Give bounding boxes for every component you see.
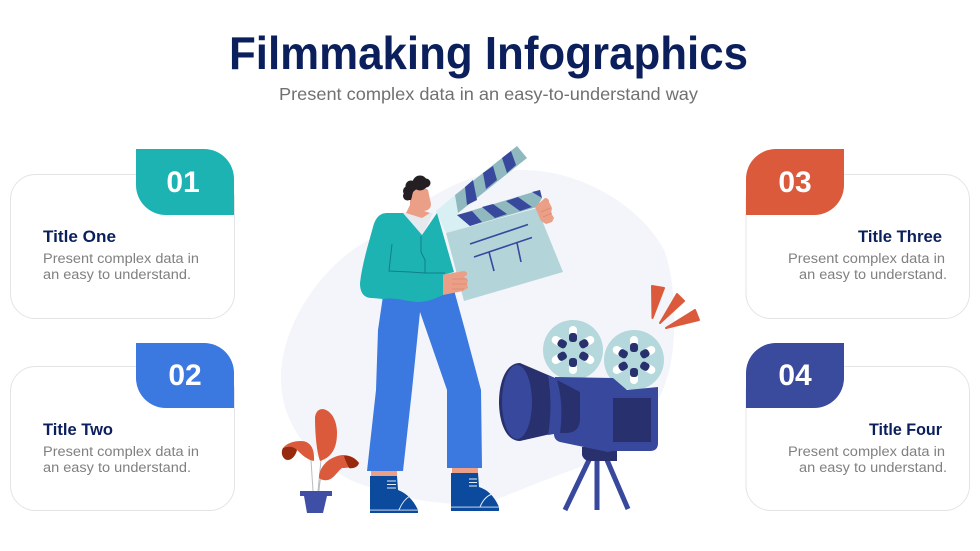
sweater <box>360 213 454 302</box>
number 03: 03 <box>778 166 812 199</box>
clapper light wedge <box>436 195 470 233</box>
head <box>406 188 431 218</box>
heading: title three: Title Three <box>858 227 942 246</box>
rays <box>652 286 699 328</box>
body text four: an easy to understand. <box>799 460 947 475</box>
subtitle: Present complex data in an easy-to-understand way <box>279 84 698 104</box>
body text three: an easy to understand. <box>799 267 947 282</box>
body text two <box>43 444 199 475</box>
heading: title two: Title Two <box>43 420 113 439</box>
heading: title four: Title Four <box>869 420 942 439</box>
illustration: person with clapperboard <box>360 146 563 513</box>
body text one <box>43 251 199 282</box>
body text three: Present complex data in <box>788 251 945 266</box>
camera body <box>554 377 658 452</box>
pot <box>300 491 332 513</box>
body text two: Present complex data in <box>43 444 199 459</box>
clapper board <box>446 208 563 301</box>
center leaf <box>315 409 337 461</box>
right reel <box>604 330 664 390</box>
body text two: an easy to understand. <box>43 460 191 475</box>
panel: card two <box>10 343 234 510</box>
illustration: potted plant <box>282 409 359 513</box>
tripod <box>565 460 628 510</box>
panel: card three <box>746 149 970 318</box>
lens <box>499 363 580 441</box>
camera screen <box>613 398 651 442</box>
number tab 03 <box>746 149 844 215</box>
number tab 04 <box>746 343 844 408</box>
heading: title one: Title One <box>43 227 116 246</box>
panel: card four <box>746 343 970 510</box>
panel: card one <box>10 149 234 318</box>
body text one: Present complex data in <box>43 251 199 266</box>
clapper top arm <box>455 146 527 213</box>
hair <box>403 176 430 200</box>
body text four: Present complex data in <box>788 444 945 459</box>
left reel <box>543 320 603 380</box>
body text four <box>788 444 947 475</box>
pants <box>367 290 482 471</box>
number tab 02 <box>136 343 234 408</box>
body text one: an easy to understand. <box>43 267 191 282</box>
background blob <box>281 170 674 504</box>
right shoe <box>451 473 499 511</box>
clapper stripe bar <box>457 190 542 226</box>
collar <box>403 211 433 236</box>
number 01: 01 <box>166 166 200 199</box>
body text three <box>788 251 947 282</box>
stems <box>311 460 330 491</box>
right leaf <box>319 455 359 480</box>
number tab 01 <box>136 149 234 215</box>
hand on clapper <box>535 198 554 224</box>
title: Filmmaking Infographics <box>229 27 748 79</box>
ankles <box>371 468 478 477</box>
left leaf <box>282 441 314 461</box>
left shoe <box>370 476 418 513</box>
hand on board <box>443 271 468 295</box>
illustration: movie camera <box>499 286 699 510</box>
number 04: 04 <box>778 359 812 392</box>
camera mount <box>582 447 617 461</box>
number 02: 02 <box>168 359 202 392</box>
